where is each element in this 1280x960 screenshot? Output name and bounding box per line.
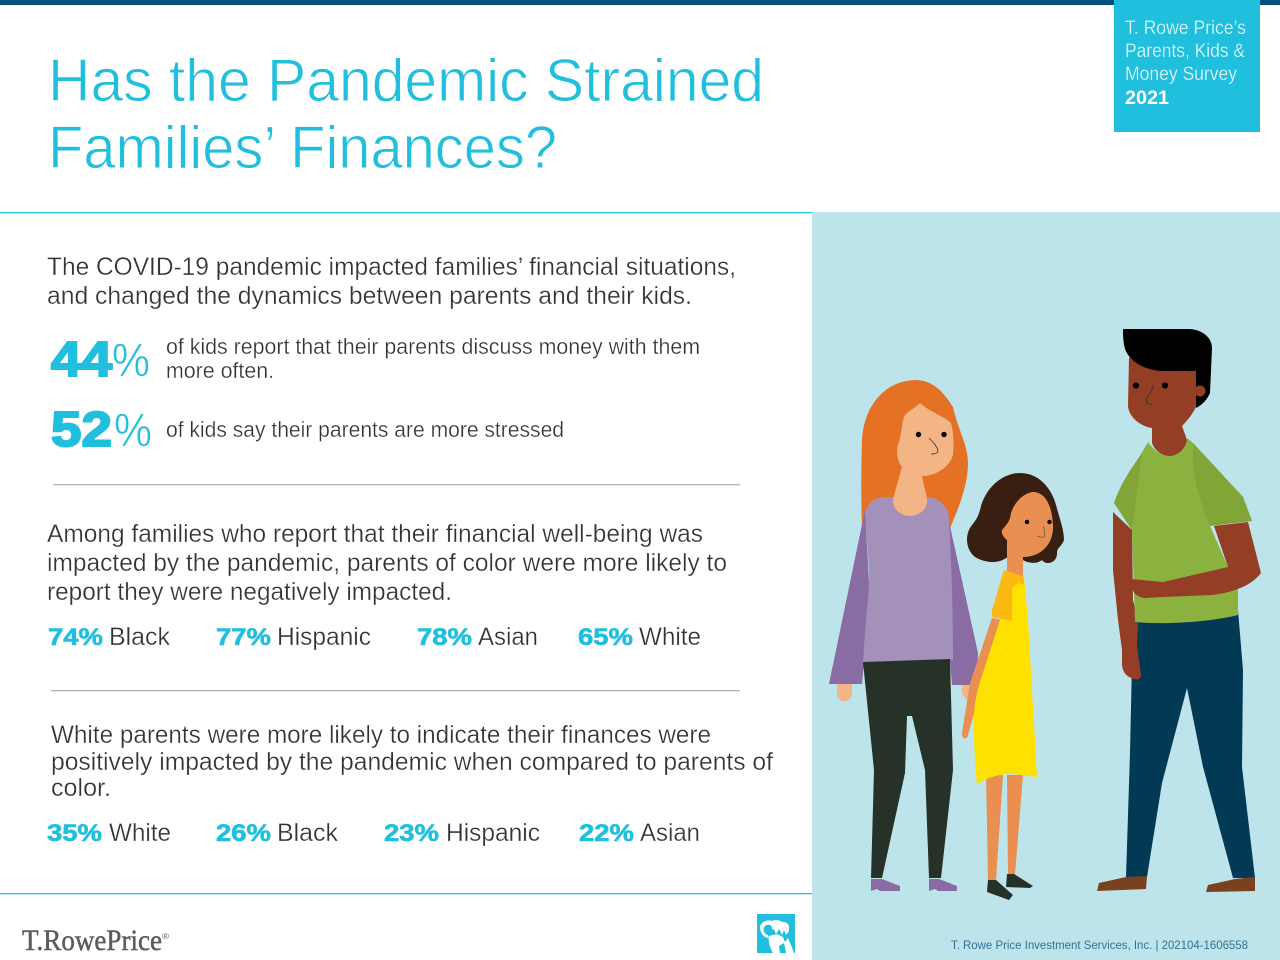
title: Has the Pandemic Strained xyxy=(48,47,764,114)
left arm xyxy=(1113,512,1141,679)
text: positive impact paragraph: White parents were more likely to indicate their finances were xyxy=(51,721,711,749)
text: positive impact paragraph xyxy=(51,721,773,802)
stat: 52%: of kids say their parents are more stressed xyxy=(166,417,564,442)
text: positive impact paragraph: color. xyxy=(51,774,111,802)
stats row: negatively impacted: 74% xyxy=(48,624,103,651)
stats row: positively impacted: 23% xyxy=(384,820,439,847)
stats row: positively impacted xyxy=(47,819,700,847)
survey badge: T. Rowe Price’s xyxy=(1125,18,1246,39)
stat: 44%: of kids report that their parents discuss money with them xyxy=(166,334,700,359)
stat: 52%: 52 xyxy=(51,403,112,457)
survey badge: Parents, Kids & xyxy=(1125,41,1245,62)
title: Families’ Finances? xyxy=(48,114,557,181)
pants xyxy=(1126,610,1255,878)
stat: 44%: % xyxy=(112,333,150,386)
sleeve xyxy=(992,570,1024,621)
hands xyxy=(837,684,974,701)
hair xyxy=(1123,329,1212,408)
neck and face xyxy=(1002,492,1053,578)
logo: T. Rowe Price wordmark: T.RowePrice xyxy=(22,924,162,957)
shirt xyxy=(1114,438,1252,623)
stats row: negatively impacted: 78% xyxy=(417,624,472,651)
shoes xyxy=(987,874,1033,900)
panel: illustration background xyxy=(812,212,1280,960)
survey badge: 2021 xyxy=(1125,88,1169,109)
footer credit: T. Rowe Price Investment Services, Inc. | 202104-1606558 xyxy=(951,940,1248,952)
stats row: negatively impacted: Black xyxy=(109,623,170,651)
dress xyxy=(974,570,1037,785)
shoes xyxy=(1097,876,1255,892)
right arm xyxy=(1132,522,1261,598)
text: negative impact paragraph xyxy=(47,520,727,606)
stats row: positively impacted: 35% xyxy=(47,820,102,847)
stats row: positively impacted: Black xyxy=(277,819,338,847)
neck and face xyxy=(1128,357,1196,456)
stat: 44%: 44 xyxy=(51,333,112,387)
stats row: negatively impacted: 65% xyxy=(578,624,633,651)
stat: 52% xyxy=(51,403,564,457)
stats row: negatively impacted: 77% xyxy=(216,624,271,651)
arm xyxy=(962,618,1002,739)
survey badge xyxy=(1114,0,1260,132)
text: positive impact paragraph: positively impacted by the pandemic when compared to parents of xyxy=(51,748,773,776)
stat: 44%: more often. xyxy=(166,358,274,383)
stats row: positively impacted: Hispanic xyxy=(446,819,540,847)
stats row: positively impacted: Asian xyxy=(640,819,700,847)
stat: 44% xyxy=(51,333,700,387)
illustration: woman xyxy=(829,380,978,891)
stats row: positively impacted: White xyxy=(109,819,171,847)
icon: ram logo xyxy=(757,914,795,953)
pants xyxy=(863,659,953,878)
title xyxy=(48,47,764,181)
hair xyxy=(861,380,968,530)
shirt shading xyxy=(1114,443,1252,530)
hair xyxy=(967,473,1064,563)
logo: T. Rowe Price wordmark: ® xyxy=(162,932,169,941)
intro text: The COVID-19 pandemic impacted families’ financial situations, xyxy=(47,253,736,281)
stats row: negatively impacted: Asian xyxy=(478,623,538,651)
stats row: negatively impacted: Hispanic xyxy=(277,623,371,651)
intro text xyxy=(47,253,736,310)
illustration: man xyxy=(1097,329,1261,892)
text: negative impact paragraph: impacted by the pandemic, parents of color were more likely to xyxy=(47,549,727,577)
survey badge: Money Survey xyxy=(1125,64,1237,85)
text: negative impact paragraph: Among families who report that their financial well-being was xyxy=(47,520,703,548)
stats row: positively impacted: 26% xyxy=(216,820,271,847)
torso xyxy=(863,497,953,663)
stat: 52%: % xyxy=(114,403,152,456)
intro text: and changed the dynamics between parents and their kids. xyxy=(47,282,692,310)
text: negative impact paragraph: report they were negatively impacted. xyxy=(47,578,452,606)
legs xyxy=(986,775,1023,880)
neck and face xyxy=(893,403,954,516)
illustration: girl xyxy=(962,473,1064,900)
stats row: positively impacted: 22% xyxy=(579,820,634,847)
sleeves xyxy=(829,510,978,685)
shoes xyxy=(871,879,957,891)
stats row: negatively impacted: White xyxy=(639,623,701,651)
stats row: negatively impacted xyxy=(48,623,701,651)
